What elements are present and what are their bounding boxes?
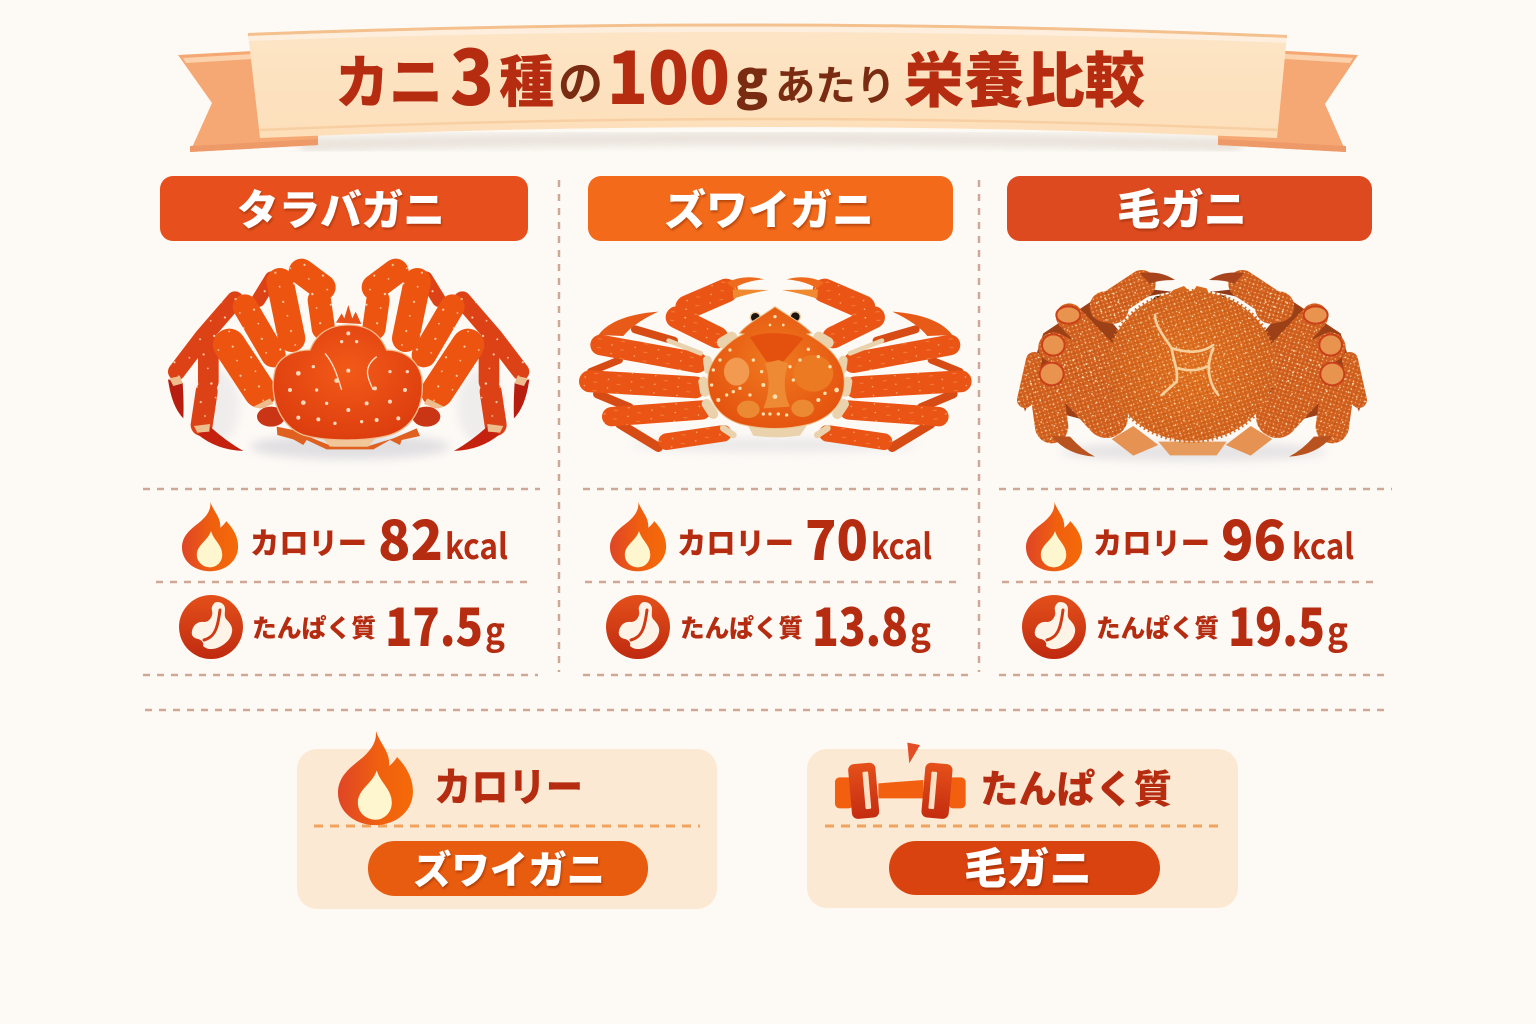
illustration: snow crab — [590, 277, 961, 452]
stats: タラバガニ: kcal — [445, 519, 508, 570]
stats: タラバガニ: たんぱく質 — [252, 609, 376, 645]
stats: ズワイガニ: g — [910, 601, 931, 655]
icon: muscle — [606, 595, 670, 659]
stats: 毛ガニ: カロリー — [1093, 519, 1210, 563]
stats: タラバガニ: g — [485, 601, 505, 655]
panel: lowest calorie: カロリー — [434, 755, 583, 813]
stats: タラバガニ — [179, 497, 508, 661]
stats: タラバガニ: 17.5 — [385, 586, 483, 661]
title text: 栄養比較 — [904, 33, 1145, 120]
stats divider lines — [143, 489, 1392, 675]
title ribbon — [178, 17, 1358, 152]
illustration: king crab — [168, 272, 529, 459]
heading: 毛ガニ: 毛ガニ — [1117, 176, 1247, 238]
stats: ズワイガニ: 13.8 — [812, 586, 908, 661]
heading: ズワイガニ — [588, 176, 953, 241]
stats: タラバガニ: カロリー — [250, 519, 367, 563]
column dividers — [559, 180, 979, 672]
stats: 毛ガニ — [1022, 497, 1354, 661]
title text: の — [558, 45, 603, 114]
heading: タラバガニ: タラバガニ — [237, 177, 445, 238]
stats: ズワイガニ — [606, 497, 932, 661]
heading: 毛ガニ — [1007, 176, 1372, 241]
icon: flame — [182, 502, 238, 571]
title text: g — [735, 38, 768, 113]
stats: ズワイガニ: 70 — [805, 497, 868, 576]
stats: 毛ガニ: kcal — [1292, 519, 1354, 570]
winner pill: ズワイガニ — [368, 840, 648, 896]
panel: highest protein — [807, 743, 1238, 908]
stats: タラバガニ: 82 — [378, 497, 443, 576]
title text: 種 — [499, 38, 554, 119]
heading: タラバガニ — [160, 176, 528, 241]
stats: 毛ガニ: g — [1327, 601, 1348, 655]
stats: 毛ガニ: 19.5 — [1228, 586, 1325, 661]
winner pill: 毛ガニ: 毛ガニ — [964, 835, 1092, 897]
stats: 毛ガニ: 96 — [1221, 497, 1286, 576]
stats: ズワイガニ: たんぱく質 — [680, 609, 803, 645]
icon: dumbbell — [835, 743, 966, 819]
title text — [335, 17, 1145, 127]
icon: muscle — [179, 595, 243, 659]
title text: カニ — [335, 36, 443, 120]
stats: ズワイガニ: カロリー — [677, 519, 794, 563]
title text: 3 — [450, 17, 494, 127]
icon: muscle — [1022, 595, 1086, 659]
stats: ズワイガニ: kcal — [871, 519, 932, 570]
icon: flame — [610, 502, 666, 571]
title text: あたり — [775, 52, 896, 112]
illustration: hair crab — [1020, 272, 1364, 461]
icon: flame — [1026, 502, 1082, 571]
panel: lowest calorie — [297, 731, 717, 909]
icon: large flame — [338, 731, 413, 825]
section divider — [145, 709, 1387, 711]
title text: 100 — [607, 20, 730, 125]
winner pill: ズワイガニ: ズワイガニ — [413, 840, 605, 896]
panel: highest protein: たんぱく質 — [980, 759, 1172, 815]
heading: ズワイガニ: ズワイガニ — [664, 177, 874, 238]
winner pill: 毛ガニ — [889, 835, 1160, 897]
stats: 毛ガニ: たんぱく質 — [1096, 609, 1219, 645]
